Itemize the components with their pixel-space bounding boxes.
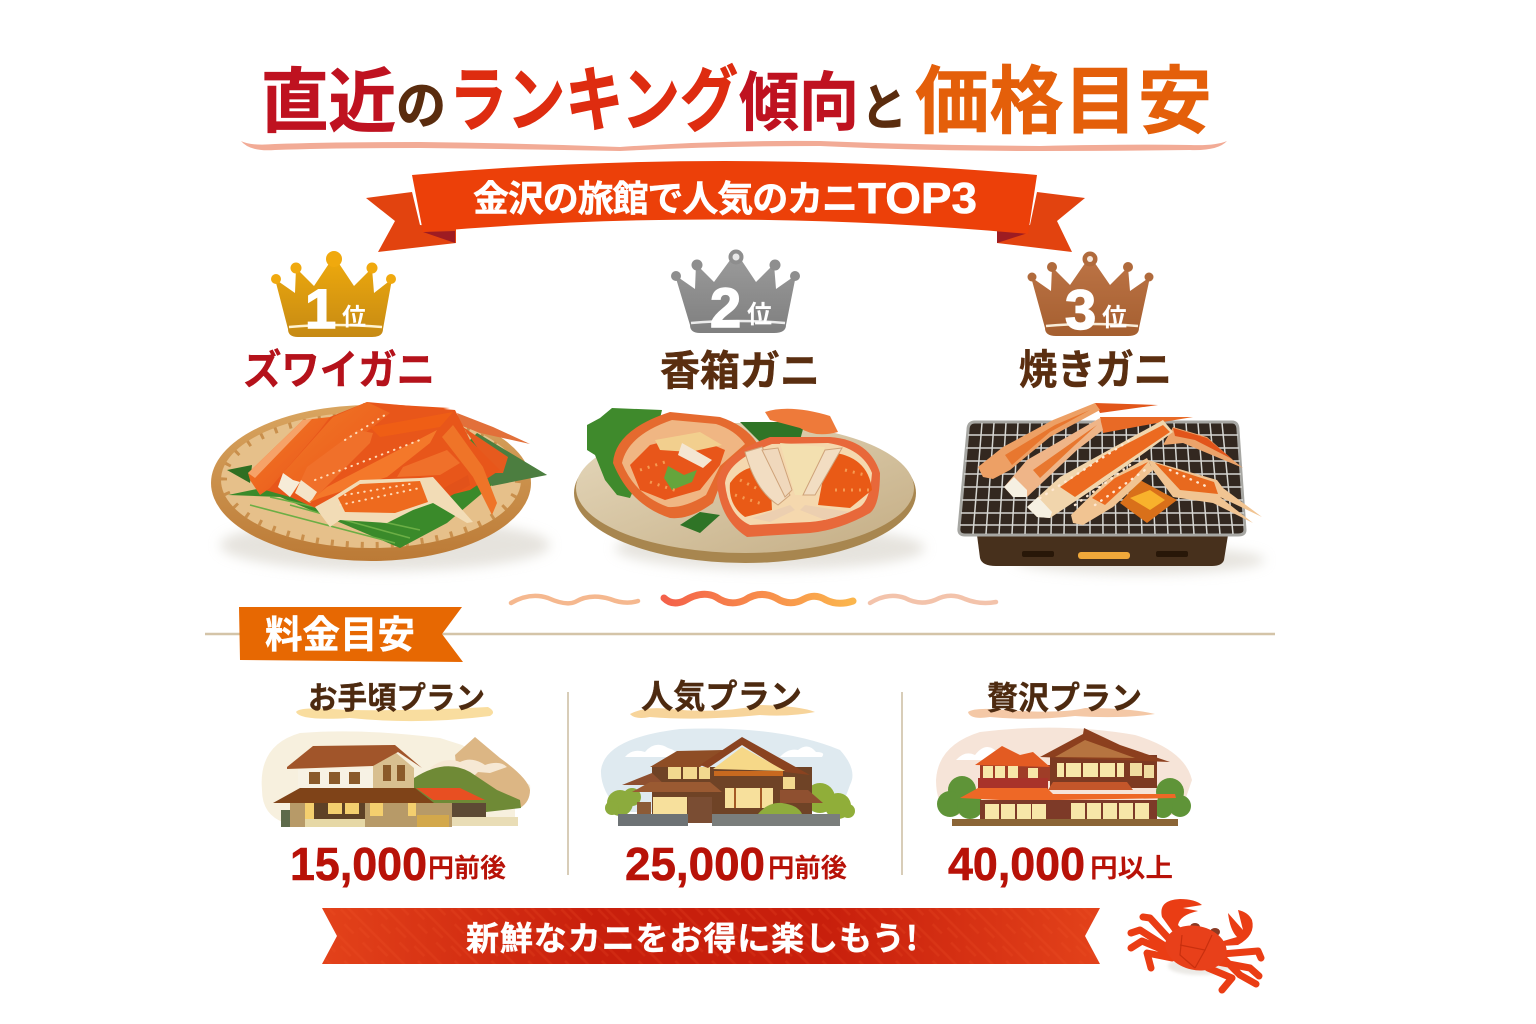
brush underline (296, 707, 493, 721)
price: 15,000 (290, 838, 427, 890)
bottom ribbon: 新鮮なカニをお得に楽しもう! (466, 912, 918, 960)
name: 香箱ガニ: 香箱ガニ (660, 337, 820, 397)
illustration: luxury ryokan (936, 728, 1192, 826)
title: の (396, 64, 446, 139)
crown: silver 2nd place: 位 (747, 295, 772, 331)
plan: luxury (936, 673, 1192, 890)
price: 円前後 (768, 848, 847, 885)
title: 傾向 (739, 52, 859, 144)
icon: crab (1131, 899, 1261, 990)
crown: bronze 3rd place (1028, 252, 1154, 341)
title: 直近 (261, 46, 396, 147)
crown: gold 1st place: 1 (305, 277, 336, 340)
name: ズワイガニ: ズワイガニ (243, 336, 435, 396)
title: 価格目安 (915, 42, 1212, 149)
decorative wave: left (511, 596, 638, 603)
plan name: 人気プラン (641, 670, 802, 718)
claw mass under the legs (258, 402, 500, 520)
decorative wave: centre (664, 594, 853, 603)
name: 焼きガニ: 焼きガニ (1019, 336, 1172, 396)
price (290, 838, 506, 890)
price: 40,000 (948, 838, 1085, 890)
brush underline (968, 708, 1155, 719)
section line (205, 633, 1275, 635)
image: grilled crab legs on wire rack (959, 403, 1265, 574)
crown: gold 1st place: 位 (342, 297, 366, 332)
image: kobako crab on stone plate (574, 408, 925, 570)
ribbon banner: TOP3: 金沢の旅館で人気のカニ (473, 170, 858, 222)
title: ランキング (449, 44, 738, 146)
illustration: mid-range ryokan (601, 728, 855, 826)
crown: bronze 3rd place: 位 (1102, 298, 1127, 334)
ranking 3 (959, 252, 1265, 574)
ribbon banner: TOP3: TOP3 (858, 174, 977, 223)
brush underline (630, 705, 815, 719)
dividers (568, 692, 902, 875)
section tag: 料金目安 (239, 604, 463, 662)
image: snow crab on bamboo tray (211, 402, 550, 571)
crown: bronze 3rd place: 3 (1065, 278, 1096, 341)
price (625, 838, 847, 890)
price (948, 838, 1173, 890)
ranking 1 (211, 251, 550, 571)
price: 25,000 (625, 838, 765, 890)
plan name: 贅沢プラン (987, 673, 1142, 719)
plan name: お手頃プラン (308, 673, 485, 718)
plan: budget (262, 673, 530, 890)
plan: popular (601, 670, 855, 890)
crown: silver 2nd place (671, 250, 800, 339)
decorative wave: right (870, 596, 996, 603)
ranking 2 (574, 250, 925, 570)
section tag: 料金目安: 料金目安 (265, 604, 415, 659)
price: 円以上 (1090, 848, 1173, 885)
illustration: small inn (262, 731, 530, 827)
crown: silver 2nd place: 2 (710, 276, 741, 339)
price: 円前後 (428, 848, 506, 885)
title: と (861, 68, 907, 140)
title (241, 42, 1227, 151)
crown: gold 1st place (271, 251, 396, 340)
ribbon banner: TOP3 (366, 161, 1085, 252)
bottom ribbon (322, 908, 1100, 964)
